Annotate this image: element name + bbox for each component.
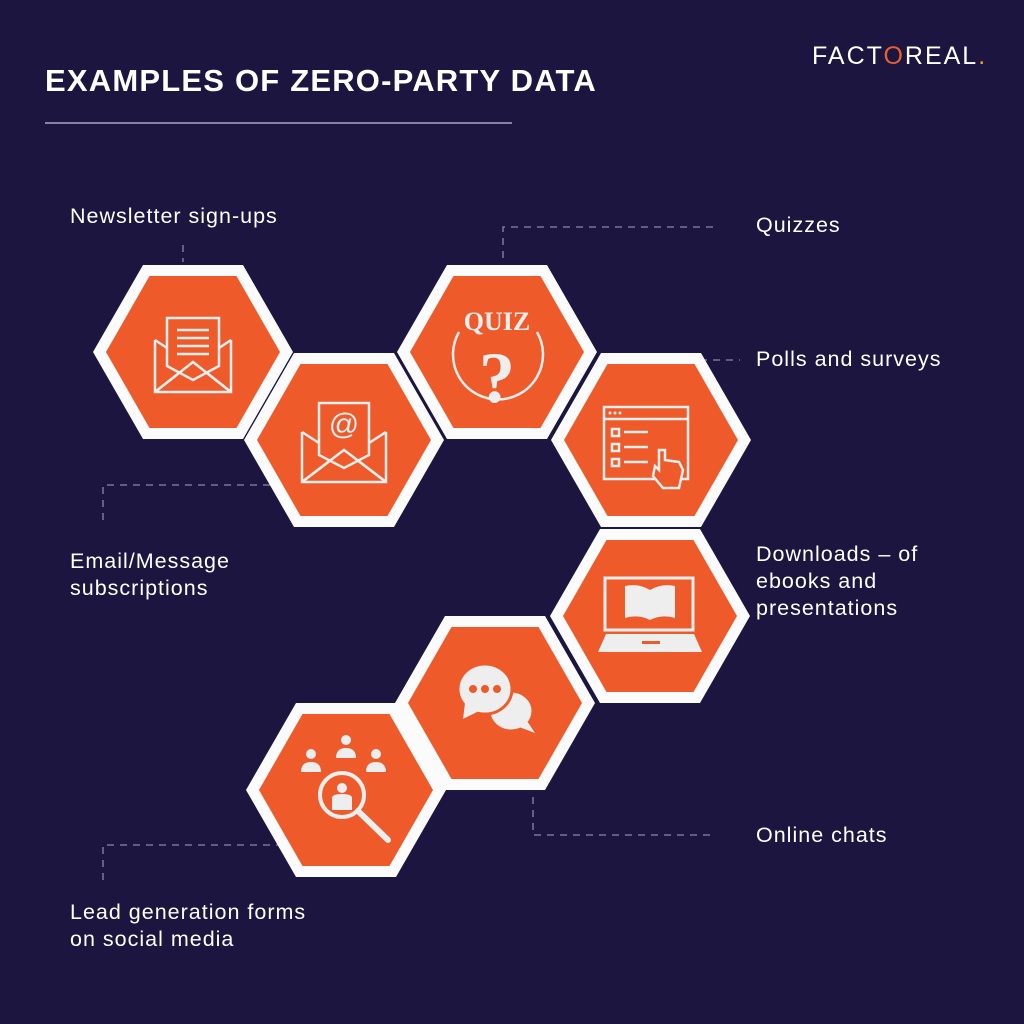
hex: newsletter xyxy=(93,265,293,439)
hex: quiz: QUIZ xyxy=(464,307,530,336)
label: downloads: ebooks and xyxy=(756,569,877,593)
hex: lead generation xyxy=(246,703,446,877)
hex: online chats xyxy=(395,616,595,790)
label: email: subscriptions xyxy=(70,576,208,600)
label: lead generation: on social media xyxy=(70,927,234,951)
logo: FACTOREAL. xyxy=(812,42,987,70)
label: online chats: Online chats xyxy=(756,823,888,847)
label: email: Email/Message xyxy=(70,549,230,573)
hex: polls xyxy=(551,353,751,527)
label: quizzes: Quizzes xyxy=(756,213,841,237)
label: downloads xyxy=(756,542,918,620)
label: lead generation: Lead generation forms xyxy=(70,900,306,924)
label: downloads: Downloads – of xyxy=(756,542,918,566)
hex: quiz xyxy=(397,265,597,439)
label: newsletter: Newsletter sign-ups xyxy=(70,204,278,228)
hex: email: @ xyxy=(329,408,359,441)
label: polls: Polls and surveys xyxy=(756,347,942,371)
title: EXAMPLES OF ZERO-PARTY DATA xyxy=(45,63,597,98)
hex: quiz: ? xyxy=(479,338,515,418)
hex: email xyxy=(244,353,444,527)
label: lead generation xyxy=(70,900,306,951)
label: email xyxy=(70,549,230,600)
label: downloads: presentations xyxy=(756,596,898,620)
hex: downloads xyxy=(550,529,750,703)
